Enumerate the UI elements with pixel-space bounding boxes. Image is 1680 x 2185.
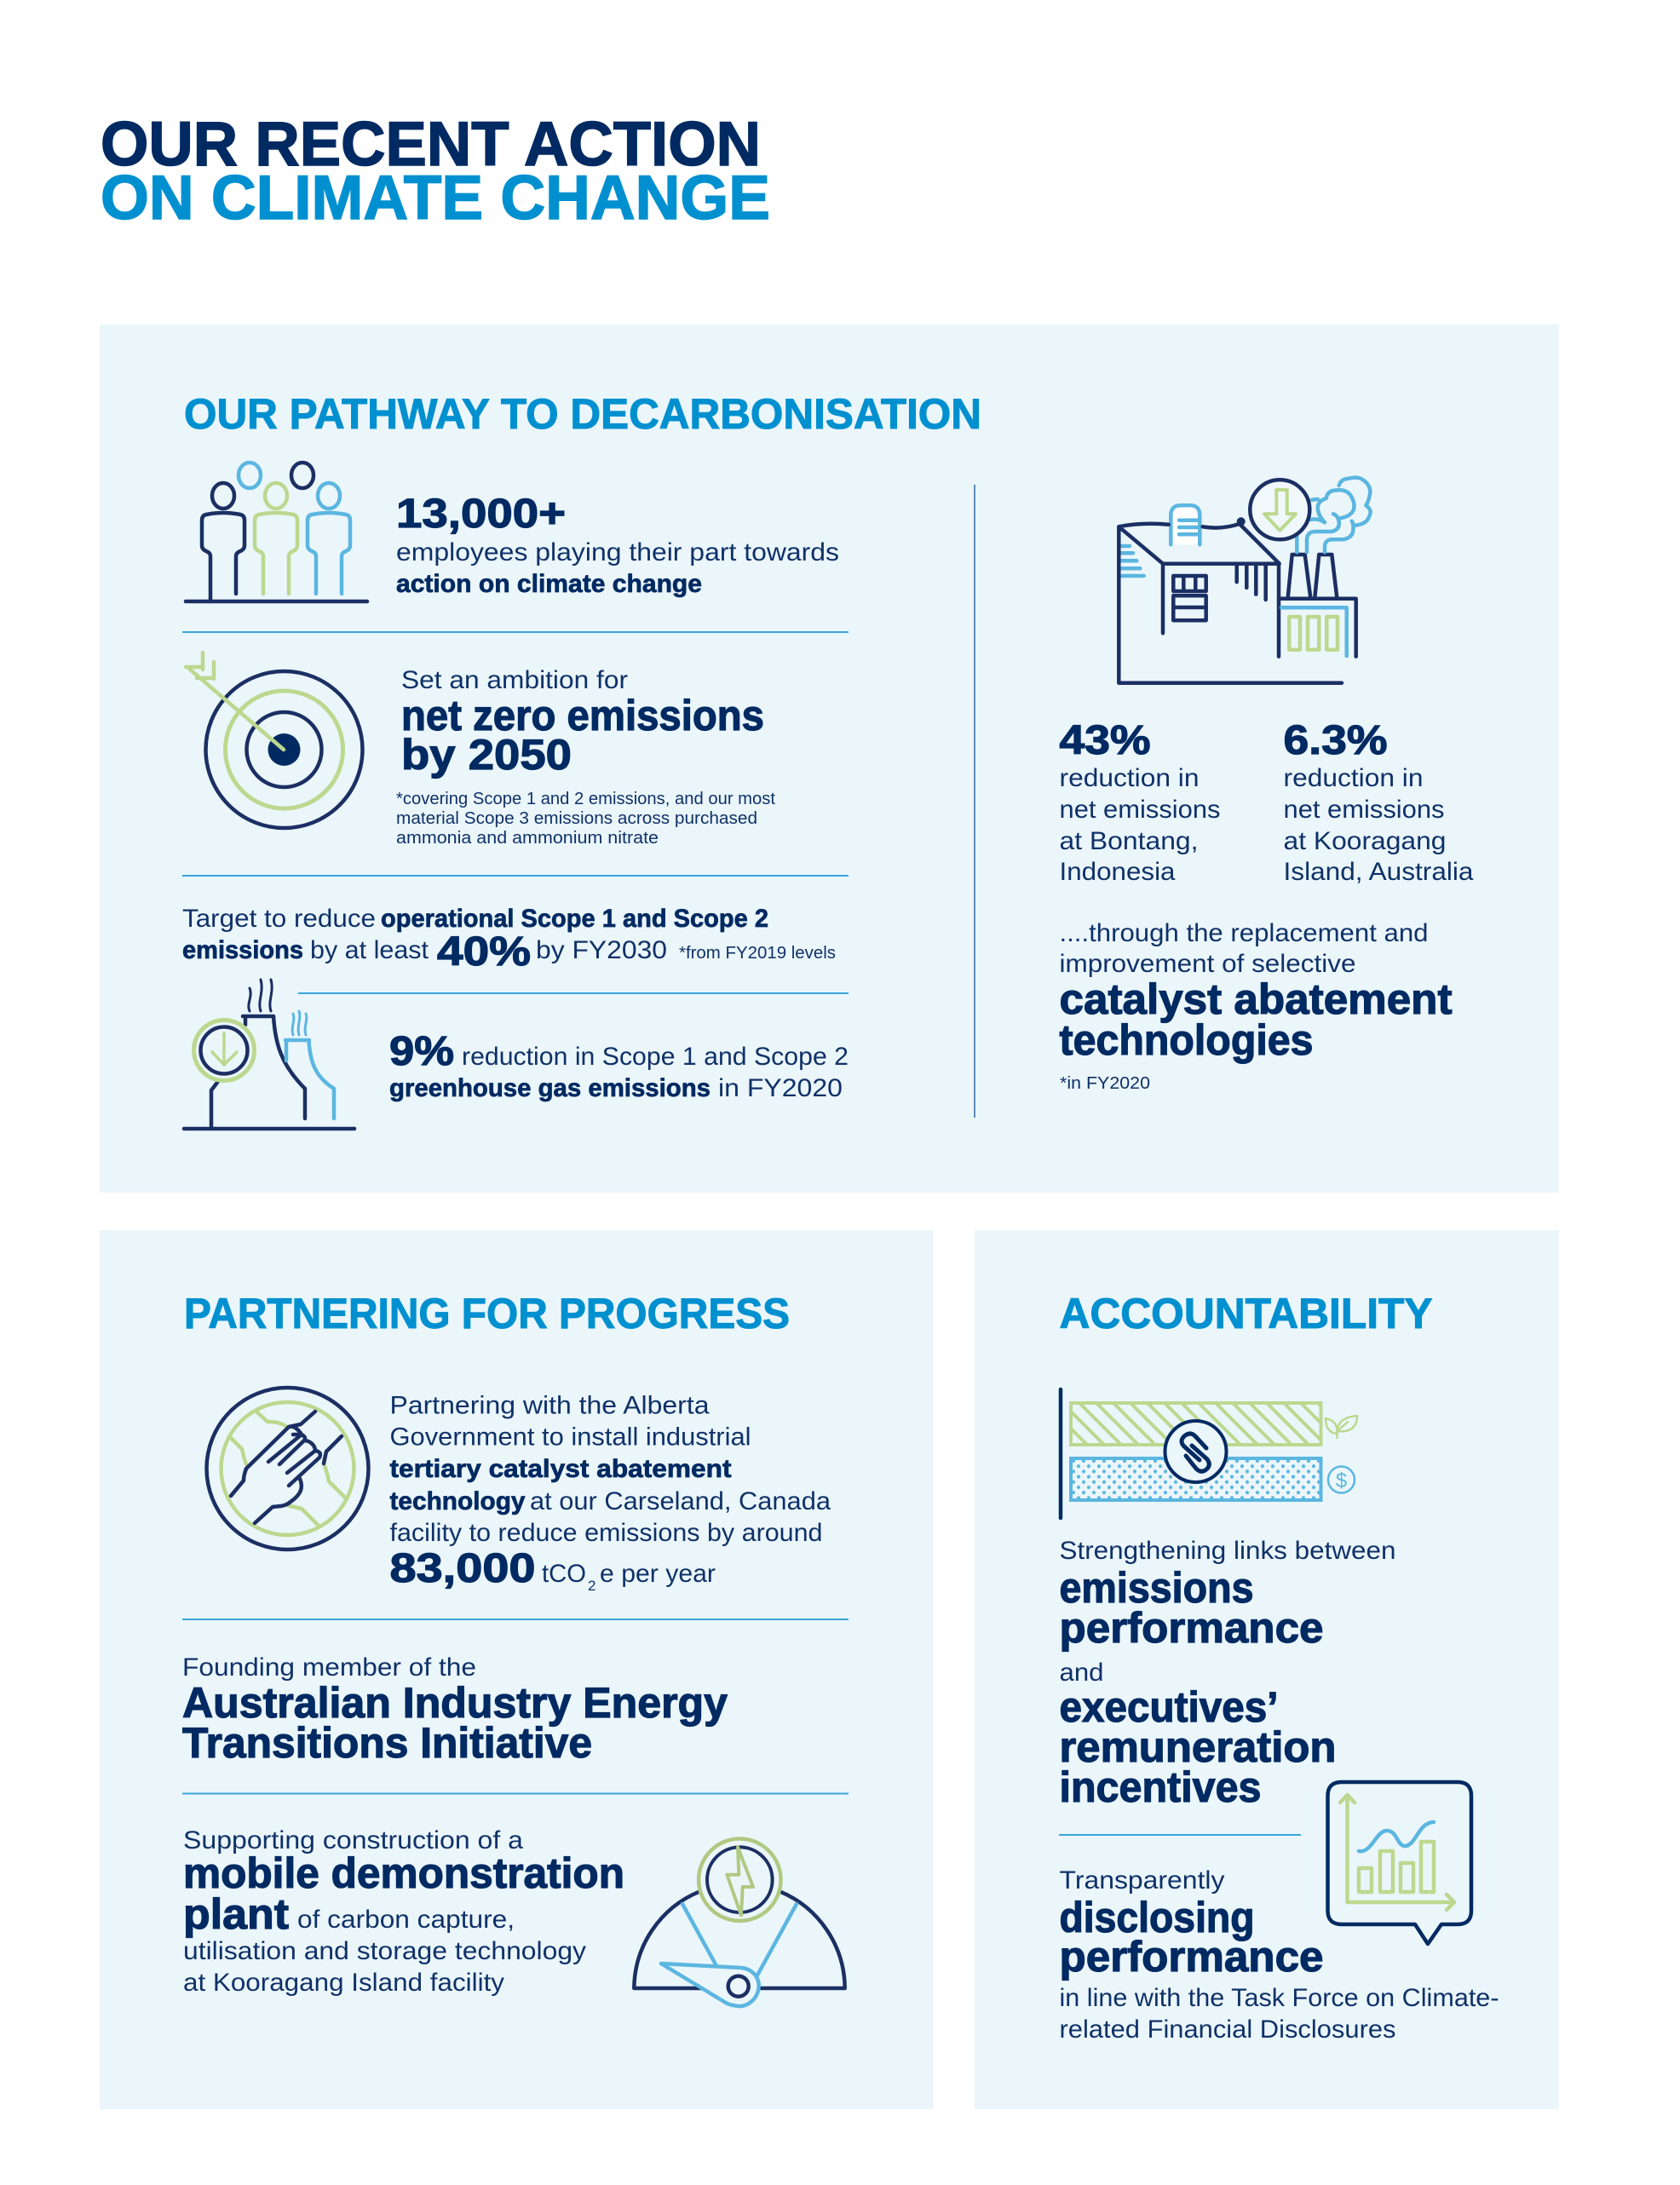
text: catalyst abatement technologies: catalyst abatement	[1060, 975, 1453, 1023]
icon: linked performance and pay bars	[1061, 1389, 1357, 1518]
text: strengthening links: and	[1060, 1659, 1104, 1687]
heading: partnering: PARTNERING FOR PROGRESS	[184, 1290, 790, 1337]
stat: 43% Bontang	[1060, 718, 1220, 886]
text: strengthening links: incentives	[1060, 1763, 1261, 1811]
text: strengthening links: remuneration	[1060, 1723, 1336, 1771]
text: Australian Industry Energy Transitions Initiative: Transitions Initiative	[182, 1719, 592, 1767]
stat: 6.3% Kooragang: at Kooragang	[1283, 827, 1447, 855]
text: Alberta Government	[390, 1392, 831, 1594]
text: Alberta Government: 2	[588, 1578, 595, 1594]
heading: accountability: ACCOUNTABILITY	[1060, 1290, 1433, 1337]
icon: chart in speech bubble	[1327, 1782, 1471, 1944]
stat: 13,000+ employees: action on climate change	[396, 570, 702, 598]
text: Alberta Government: e per year	[600, 1560, 716, 1588]
text: net zero ambition	[396, 666, 775, 848]
text: net zero ambition: Set an ambition for	[401, 666, 628, 694]
text: 40% target: by at least	[310, 936, 429, 964]
text: Alberta Government: tertiary catalyst abatement	[390, 1455, 732, 1483]
stat: 9% reduction: greenhouse gas emissions	[389, 1074, 711, 1102]
icon: factory with down arrow	[1119, 478, 1371, 683]
title	[101, 110, 770, 233]
text: mobile demonstration plant: Supporting construction of a	[183, 1826, 523, 1854]
text: Australian Industry Energy Transitions Initiative	[182, 1653, 728, 1767]
text: Alberta Government: technology	[390, 1487, 526, 1515]
text: mobile demonstration plant	[183, 1826, 624, 1997]
text: mobile demonstration plant: mobile demonstration	[183, 1849, 624, 1897]
stat: 13,000+ employees: employees playing their part towards	[396, 538, 839, 566]
stat: 6.3% Kooragang	[1283, 718, 1474, 886]
text: mobile demonstration plant: utilisation and storage technology	[183, 1937, 586, 1965]
text: transparently disclosing performance: in line with the Task Force on Climate-	[1060, 1984, 1499, 2012]
stat: 6.3% Kooragang: Island, Australia	[1283, 858, 1474, 886]
title: ON CLIMATE CHANGE	[101, 164, 770, 233]
text: mobile demonstration plant: at Kooragang Island facility	[183, 1969, 504, 1997]
stat: 9% reduction: reduction in Scope 1 and Scope 2	[462, 1043, 849, 1071]
stat: 43% Bontang: 43%	[1060, 718, 1150, 763]
text: catalyst abatement technologies: ....through the replacement and	[1060, 919, 1428, 947]
icon: linked performance and pay bars: $	[1336, 1469, 1347, 1492]
stat: 43% Bontang: at Bontang,	[1060, 827, 1198, 855]
text: Australian Industry Energy Transitions Initiative: Australian Industry Energy	[182, 1679, 728, 1727]
icon: handshake globe	[206, 1388, 368, 1550]
stat: 9% reduction: in FY2020	[718, 1074, 843, 1102]
text: net zero ambition: by 2050	[401, 731, 572, 779]
text: catalyst abatement technologies: technologies	[1060, 1016, 1314, 1064]
text: net zero ambition: net zero emissions	[401, 692, 764, 739]
icon: gauge with lightning bolt	[634, 1838, 845, 2006]
text: catalyst abatement technologies: improvement of selective	[1060, 950, 1356, 978]
heading: pathway: OUR PATHWAY TO DECARBONISATION	[184, 390, 981, 438]
text: net zero ambition: material Scope 3 emissions across purchased	[396, 809, 757, 828]
stat: 6.3% Kooragang: 6.3%	[1283, 718, 1387, 763]
text: 40% target: Target to reduce	[182, 905, 376, 933]
panel: accountability	[975, 1230, 1559, 2109]
text: transparently disclosing performance	[1060, 1866, 1499, 2044]
title: OUR RECENT ACTION	[101, 110, 761, 179]
text: catalyst abatement technologies: *in FY2020	[1060, 1074, 1150, 1093]
text: net zero ambition: *covering Scope 1 and 2 emissions, and our most	[396, 790, 775, 808]
text: Alberta Government: Government to install industrial	[390, 1423, 751, 1452]
icon: chimneys with down arrow	[184, 980, 354, 1129]
stat: 13,000+ employees: 13,000+	[396, 492, 566, 537]
stat: 43% Bontang: net emissions	[1060, 796, 1220, 824]
text: transparently disclosing performance: disclosing	[1060, 1894, 1254, 1941]
stat: 6.3% Kooragang: net emissions	[1283, 796, 1445, 824]
icon: target and arrow	[186, 653, 363, 828]
text: 40% target: emissions	[182, 936, 303, 964]
text: Alberta Government: tCO	[542, 1560, 586, 1588]
text: strengthening links: Strengthening links between	[1060, 1537, 1395, 1565]
text: strengthening links	[1060, 1537, 1395, 1811]
stat: 43% Bontang: Indonesia	[1060, 858, 1176, 886]
text: strengthening links: emissions	[1060, 1564, 1254, 1612]
stat: 43% Bontang: reduction in	[1060, 764, 1200, 792]
text: transparently disclosing performance: related Financial Disclosures	[1060, 2015, 1395, 2044]
text: Alberta Government: 83,000	[390, 1546, 535, 1591]
stat: 9% reduction	[389, 1029, 849, 1102]
text: Alberta Government: facility to reduce emissions by around	[390, 1519, 823, 1547]
text: 40% target: *from FY2019 levels	[679, 944, 836, 963]
stat: 9% reduction: 9%	[389, 1029, 454, 1074]
text: strengthening links: executives’	[1060, 1683, 1278, 1731]
panel: our pathway to decarbonisation	[100, 325, 1559, 1193]
text: 40% target	[182, 905, 836, 975]
text: 40% target: 40%	[437, 929, 531, 975]
text: Australian Industry Energy Transitions Initiative: Founding member of the	[182, 1653, 476, 1682]
text: mobile demonstration plant: plant	[183, 1890, 289, 1938]
text: mobile demonstration plant: of carbon capture,	[297, 1906, 515, 1934]
text: strengthening links: performance	[1060, 1604, 1324, 1652]
text: net zero ambition: ammonia and ammonium nitrate	[396, 829, 659, 848]
text: Alberta Government: at our Carseland, Canada	[530, 1487, 831, 1515]
text: 40% target: operational Scope 1 and Scope 2	[381, 905, 768, 933]
text: Alberta Government: Partnering with the Alberta	[390, 1392, 710, 1419]
stat: 13,000+ employees	[396, 492, 839, 598]
text: transparently disclosing performance: Transparently	[1060, 1866, 1225, 1895]
stat: 6.3% Kooragang: reduction in	[1283, 764, 1423, 792]
text: catalyst abatement technologies	[1060, 919, 1453, 1093]
text: 40% target: by FY2030	[536, 936, 667, 964]
text: transparently disclosing performance: performance	[1060, 1933, 1324, 1981]
icon: people	[186, 463, 367, 601]
panel: partnering for progress	[100, 1230, 934, 2109]
